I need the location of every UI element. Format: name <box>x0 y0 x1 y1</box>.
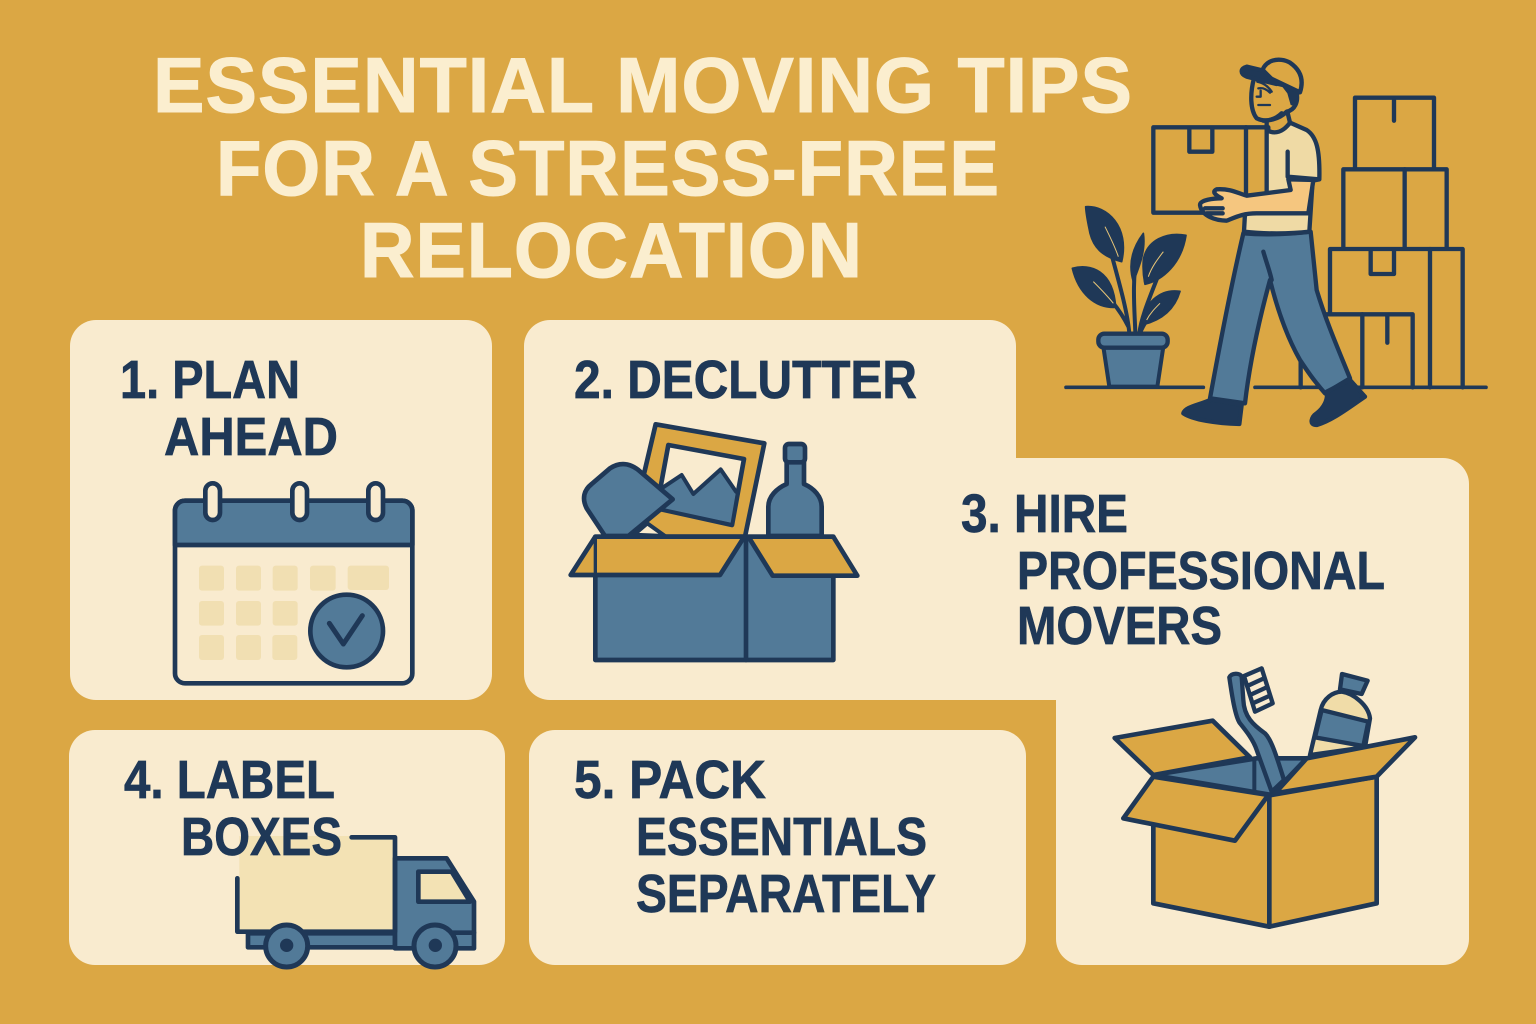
stacked boxes <box>1301 98 1463 387</box>
heading: pack essentials separately: SEPARATELY <box>636 864 936 924</box>
toothbrush <box>1229 668 1284 792</box>
heading: hire professional movers: 3. HIRE <box>961 484 1128 544</box>
carried box <box>1153 127 1268 213</box>
heading: pack essentials separately <box>574 750 936 924</box>
heading: declutter: 2. DECLUTTER <box>574 350 917 410</box>
heading: plan ahead: 1. PLAN <box>120 350 300 410</box>
title: FOR A STRESS-FREE <box>216 124 1000 212</box>
panel: 4 label boxes <box>69 730 505 967</box>
person <box>1183 60 1365 425</box>
heading: hire professional movers: MOVERS <box>1017 596 1222 656</box>
potted plant <box>1072 207 1186 387</box>
title <box>153 41 1133 294</box>
icon: open box with toothbrush and bottle <box>1115 668 1415 927</box>
panel: 1 plan ahead <box>70 320 492 700</box>
heading: plan ahead: AHEAD <box>164 407 338 467</box>
heading: hire professional movers <box>961 484 1385 656</box>
heading: plan ahead <box>120 350 338 467</box>
illustration: mover carrying a box <box>1066 60 1486 425</box>
icon: calendar <box>175 483 412 683</box>
ground line <box>1066 382 1486 393</box>
heading: pack essentials separately: ESSENTIALS <box>636 807 927 867</box>
icon: box of clutter <box>571 424 857 660</box>
panel: 5 pack essentials separately <box>529 730 1026 965</box>
title: RELOCATION <box>360 206 863 294</box>
heading: label boxes: 4. LABEL <box>124 750 335 810</box>
heading: pack essentials separately: 5. PACK <box>574 750 766 810</box>
icon: moving truck <box>237 836 474 967</box>
heading: label boxes <box>124 750 342 867</box>
panel: 2 declutter and 3 hire professional movers <box>524 320 1469 965</box>
heading: hire professional movers: PROFESSIONAL <box>1017 541 1385 601</box>
heading: label boxes: BOXES <box>181 807 342 867</box>
title: ESSENTIAL MOVING TIPS <box>153 41 1133 129</box>
bottle <box>1310 674 1370 755</box>
